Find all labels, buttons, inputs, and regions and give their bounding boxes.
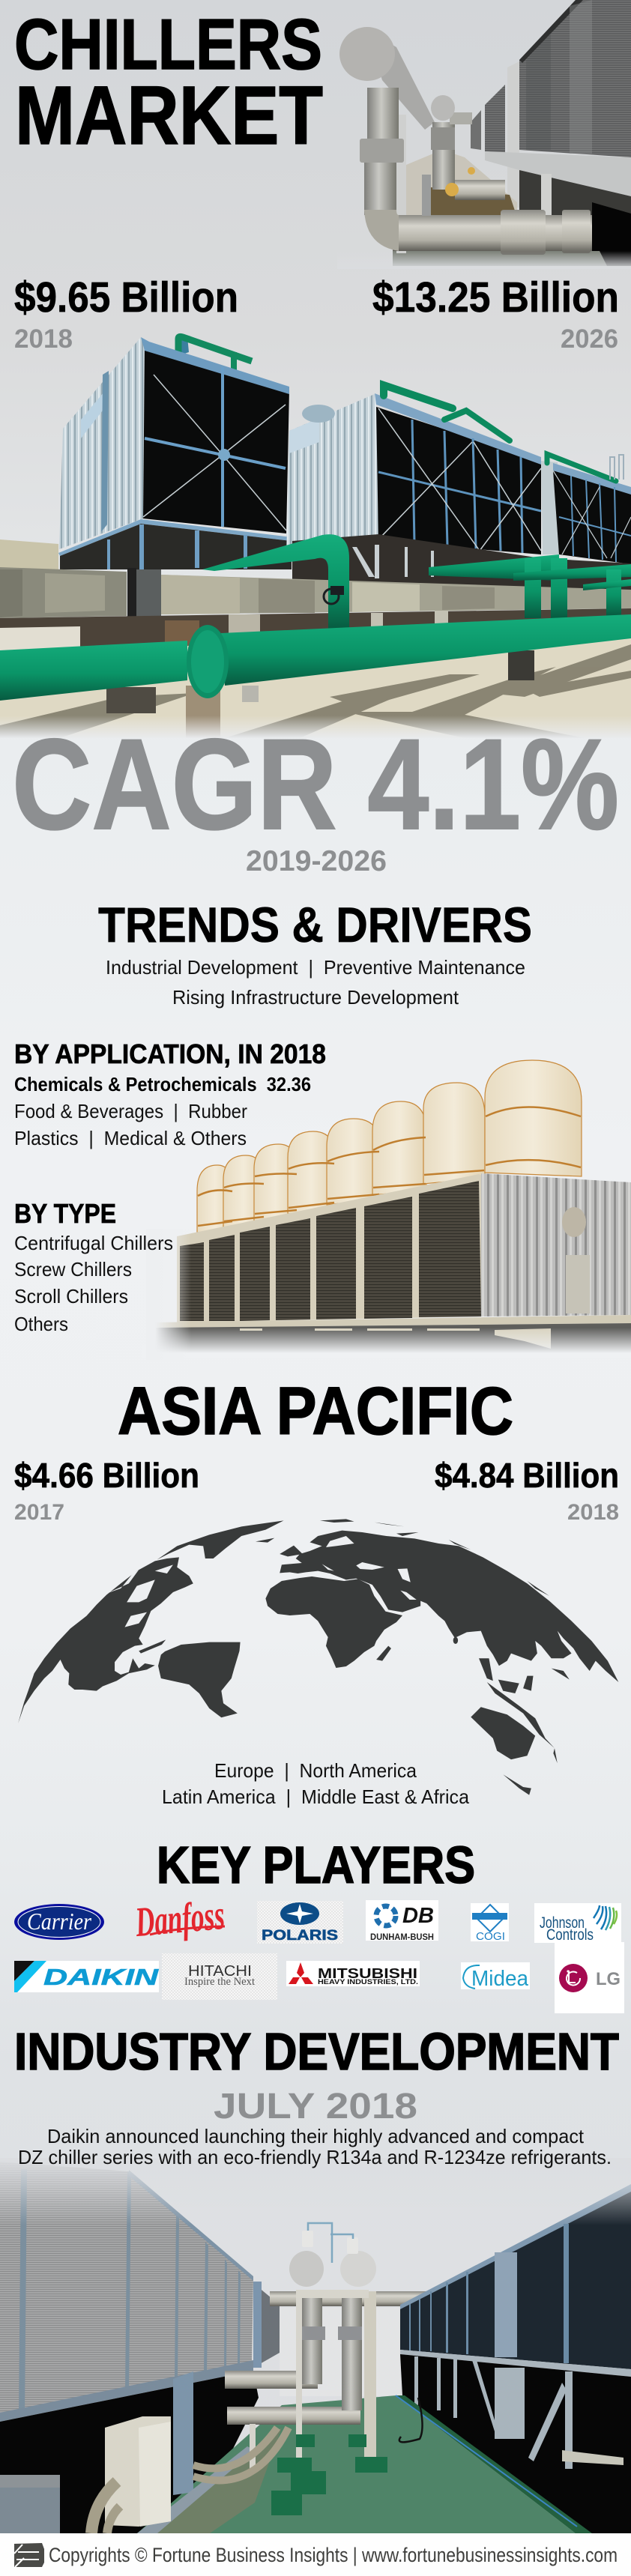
logo: Dunham-Bush xyxy=(366,1900,438,1942)
stat: 2026 market value xyxy=(372,273,619,354)
stat: Asia Pacific 2017 xyxy=(14,1456,199,1525)
type heading: BY TYPE xyxy=(14,1198,116,1229)
logo: Danfoss xyxy=(133,1892,226,1946)
logo: LG: LG xyxy=(596,1969,621,1989)
logo: COGI: COGI xyxy=(476,1930,505,1943)
logo: Hitachi xyxy=(162,1953,277,2000)
logo: Mitsubishi: HEAVY INDUSTRIES, LTD. xyxy=(318,1978,418,1986)
other regions: Europe | North America xyxy=(214,1759,417,1782)
application list xyxy=(14,1073,311,1149)
logo: Johnson Controls: Johnson xyxy=(540,1914,585,1932)
application heading: BY APPLICATION, IN 2018 xyxy=(14,1038,326,1069)
logo: Mitsubishi xyxy=(286,1961,420,1986)
logo: Danfoss: Danfoss xyxy=(133,1892,226,1946)
stat: Asia Pacific 2017: $4.66 Billion xyxy=(14,1456,199,1495)
photo: chiller pipes on rooftop xyxy=(337,0,631,269)
trends heading: TRENDS & DRIVERS xyxy=(98,897,532,952)
stat: 2018 market value: $9.65 Billion xyxy=(14,273,238,321)
development description: Daikin announced launching their highly advanced and compact xyxy=(47,2125,585,2147)
development description xyxy=(18,2125,612,2168)
logo: Carrier xyxy=(14,1904,104,1940)
development date: JULY 2018 xyxy=(214,2087,417,2126)
logo: Polaris: POLARIS xyxy=(262,1928,338,1944)
photo: cooling units with domes xyxy=(142,1060,631,1360)
type list: Scroll Chillers xyxy=(14,1285,128,1307)
trends list xyxy=(106,956,525,1009)
logo: Daikin: DAIKIN xyxy=(43,1964,159,1990)
key players heading: KEY PLAYERS xyxy=(157,1836,475,1894)
stat: Asia Pacific 2018: 2018 xyxy=(567,1500,619,1525)
development description: DZ chiller series with an eco-friendly R134a and R-1234ze refrigerants. xyxy=(18,2146,612,2168)
application list: Food & Beverages | Rubber xyxy=(14,1100,247,1122)
type list: Centrifugal Chillers xyxy=(14,1232,173,1254)
other regions: Latin America | Middle East & Africa xyxy=(162,1786,470,1808)
logo: Carrier: Carrier xyxy=(27,1908,91,1935)
application list: Chemicals & Petrochemicals 32.36 xyxy=(14,1073,311,1095)
type list: Screw Chillers xyxy=(14,1258,132,1281)
logo: Mitsubishi: MITSUBISHI xyxy=(318,1966,417,1981)
logo: Dunham-Bush: DUNHAM-BUSH xyxy=(370,1932,434,1942)
logo: COGI xyxy=(471,1903,509,1943)
type list xyxy=(14,1232,173,1335)
photo: cooling towers with green pipes xyxy=(0,336,631,738)
stat: 2018 market value xyxy=(14,273,238,354)
logo: Hitachi: HITACHI xyxy=(188,1963,252,1980)
type list: Others xyxy=(14,1313,68,1335)
title: MARKET xyxy=(15,70,323,162)
trends list: Rising Infrastructure Development xyxy=(172,986,459,1009)
logo: Midea: Midea xyxy=(471,1967,529,1991)
stat: 2018 market value: 2018 xyxy=(14,324,73,354)
title xyxy=(14,4,323,162)
stat: 2026 market value: 2026 xyxy=(561,324,618,354)
logo: Polaris xyxy=(257,1901,343,1944)
world map xyxy=(14,1519,618,1795)
logo: Johnson Controls: Controls xyxy=(546,1926,594,1944)
logo: Dunham-Bush: DB xyxy=(402,1904,434,1928)
logo: Daikin xyxy=(14,1961,159,1992)
other regions xyxy=(162,1759,470,1808)
logo: Hitachi: Inspire the Next xyxy=(184,1976,256,1988)
stat: Asia Pacific 2018: $4.84 Billion xyxy=(435,1456,619,1495)
application list: Plastics | Medical & Others xyxy=(14,1127,247,1149)
region heading: ASIA PACIFIC xyxy=(118,1374,513,1449)
footer xyxy=(0,2533,631,2576)
logo: Johnson Controls xyxy=(534,1903,621,1944)
title: CHILLERS xyxy=(14,4,322,85)
photo: rooftop chiller row xyxy=(0,2158,631,2533)
stat: Asia Pacific 2018 xyxy=(435,1456,619,1525)
trends list: Industrial Development | Preventive Maintenance xyxy=(106,956,525,979)
stat: Asia Pacific 2017: 2017 xyxy=(14,1500,64,1525)
CAGR period: 2019-2026 xyxy=(246,845,387,877)
logo: LG xyxy=(555,1942,624,2013)
icon: Fortune Business Insights logo xyxy=(14,2543,44,2567)
